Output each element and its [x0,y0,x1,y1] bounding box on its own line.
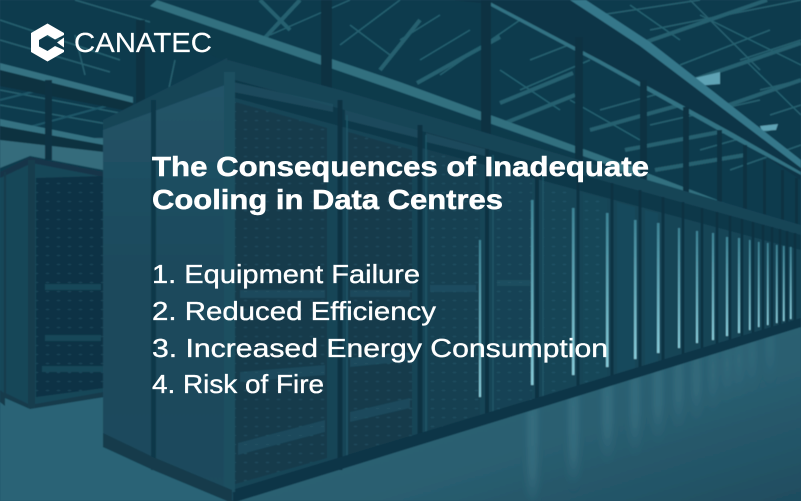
main server row: front face [228,60,801,501]
left server rack [0,157,104,409]
shelf rails [238,280,530,455]
main cable tray [150,6,801,250]
far cable tray [450,0,801,180]
frame highlights [233,85,543,490]
title: The Consequences of Inadequate [152,151,649,182]
item 3: 3. Increased Energy Consumption [152,333,608,363]
logo: Canatec [31,24,212,62]
ceiling [0,0,801,330]
list of consequences [152,259,608,399]
rack base [232,318,801,501]
item 4: 4. Risk of Fire [152,369,324,399]
floor [0,390,232,501]
title: Cooling in Data Centres [152,184,503,215]
cyan status light bars [479,200,792,397]
left cable tray [0,63,133,103]
wordmark: CANATEC [74,27,212,58]
steel columns [45,0,798,235]
icon: hexagon C mark [31,24,64,62]
title [152,151,649,215]
server dots [235,102,607,484]
door separators [340,100,795,470]
item 2: 2. Reduced Efficiency [152,296,436,326]
door panels [235,102,658,484]
floor reflections [529,330,772,490]
back wall behind left rack [0,138,103,170]
main server row: end panel [103,58,235,501]
item 1: 1. Equipment Failure [152,259,420,289]
bright ceiling panels [695,72,778,131]
